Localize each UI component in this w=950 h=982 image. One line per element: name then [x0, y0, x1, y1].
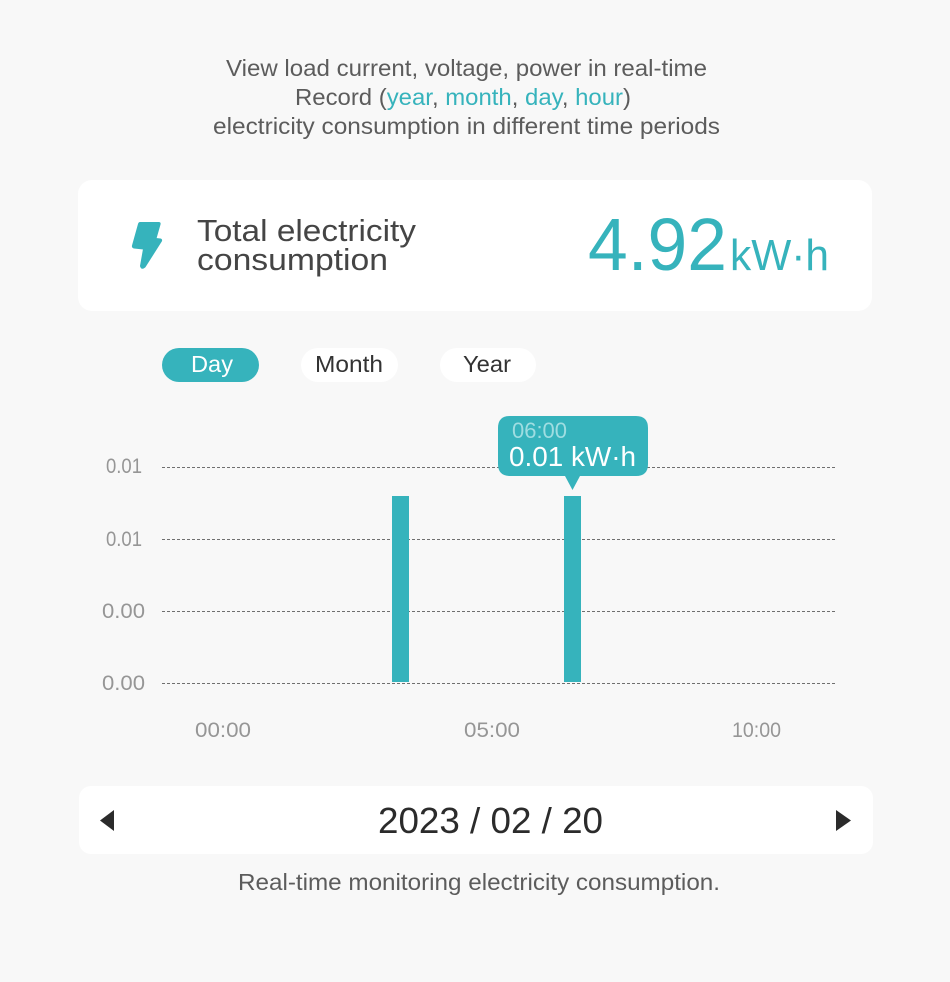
tab: Month: Month	[315, 351, 383, 377]
bar: 06:00	[564, 496, 581, 682]
tab: Day: Day	[191, 351, 234, 377]
total value: 4.92	[588, 203, 727, 286]
y axis labels: 0.01	[106, 455, 142, 478]
y axis labels: 0.00	[102, 672, 145, 695]
panel label: consumption	[197, 242, 388, 277]
tooltip	[498, 416, 648, 490]
tab: Year	[440, 348, 536, 382]
intro text: View load current, voltage, power in real-time	[226, 55, 707, 81]
tab: Year: Year	[463, 351, 511, 377]
tooltip: 0.01 kW·h	[509, 441, 636, 472]
y axis labels	[102, 455, 145, 695]
y axis labels: 0.00	[102, 600, 145, 623]
date: 2023 / 02 / 20	[378, 800, 603, 841]
tabs: period selector	[162, 348, 536, 382]
total value: kW·h	[730, 231, 829, 280]
x axis labels: 00:00	[195, 719, 251, 742]
x axis labels	[195, 719, 781, 742]
panel: total electricity consumption	[78, 180, 872, 311]
date navigator	[79, 786, 873, 854]
total value	[588, 203, 829, 286]
icon: next arrow	[836, 810, 851, 831]
icon: previous arrow	[100, 810, 114, 831]
intro text	[213, 55, 720, 139]
tooltip: 06:00	[512, 418, 567, 443]
y axis labels: 0.01	[106, 528, 142, 551]
caption: Real-time monitoring electricity consumption.	[238, 869, 720, 895]
intro text: Record (year, month, day, hour)	[295, 84, 631, 110]
bar chart	[102, 416, 836, 742]
icon: lightning bolt	[132, 222, 162, 268]
intro text: electricity consumption in different time periods	[213, 113, 720, 139]
x axis labels: 10:00	[732, 719, 781, 742]
panel label: Total electricity	[197, 213, 417, 248]
tab: Month	[301, 348, 398, 382]
x axis labels: 05:00	[464, 719, 520, 742]
panel label	[197, 213, 417, 277]
bar: 03:00	[392, 496, 409, 682]
tab: Day	[162, 348, 259, 382]
